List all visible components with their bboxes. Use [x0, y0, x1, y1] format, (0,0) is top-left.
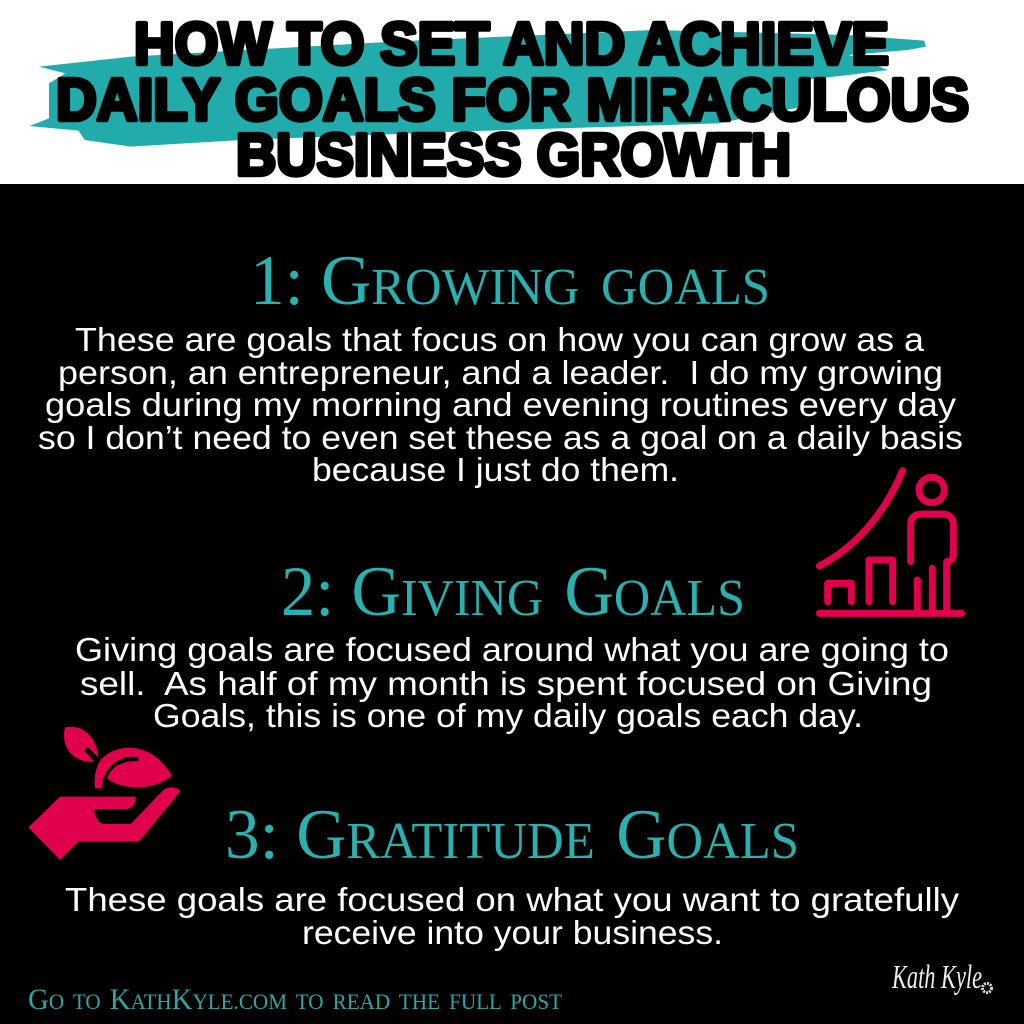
heading: growing goals: 1: GROWING GOALS — [250, 242, 770, 320]
text block: growing goals: These are goals that focus on how you can grow as a — [75, 321, 925, 358]
text block: gratitude goals — [65, 881, 960, 951]
text block: giving goals: Goals, this is one of my daily goals each day. — [153, 697, 863, 734]
text block: gratitude goals: These goals are focused on what you want to gratefully — [65, 881, 960, 918]
text block: growing goals: person, an entrepreneur, and a leader. I do my growing — [58, 354, 943, 391]
text block: growing goals: so I don’t need to even set these as a goal on a daily basis — [38, 419, 963, 456]
icon: small emblem — [982, 984, 992, 992]
title: DAILY GOALS FOR MIRACULOUS — [56, 67, 969, 133]
title: BUSINESS GROWTH — [236, 122, 791, 188]
text block: giving goals: sell. As half of my month is spent focused on Giving — [80, 665, 932, 702]
teal brush stroke — [29, 30, 926, 147]
header panel — [0, 0, 1024, 184]
text block: gratitude goals: receive into your business. — [302, 914, 723, 951]
title — [56, 11, 969, 188]
icon: hand holding plant — [28, 727, 181, 860]
footer call to action: GO TO KATHKYLE.COM TO READ THE FULL POST — [28, 983, 563, 1016]
text block: growing goals: goals during my morning and evening routines every day — [45, 386, 957, 423]
text block: growing goals: because I just do them. — [312, 451, 679, 488]
heading: gratitude goals: 3: GRATITUDE GOALS — [225, 796, 799, 874]
text block: giving goals: Giving goals are focused around what you are going to — [75, 631, 949, 668]
text block: growing goals — [38, 321, 963, 488]
title: HOW TO SET AND ACHIEVE — [134, 11, 889, 77]
icon: person with growth chart — [819, 471, 962, 613]
text block: giving goals — [75, 631, 949, 734]
heading: giving goals: 2: GIVING GOALS — [281, 553, 745, 631]
